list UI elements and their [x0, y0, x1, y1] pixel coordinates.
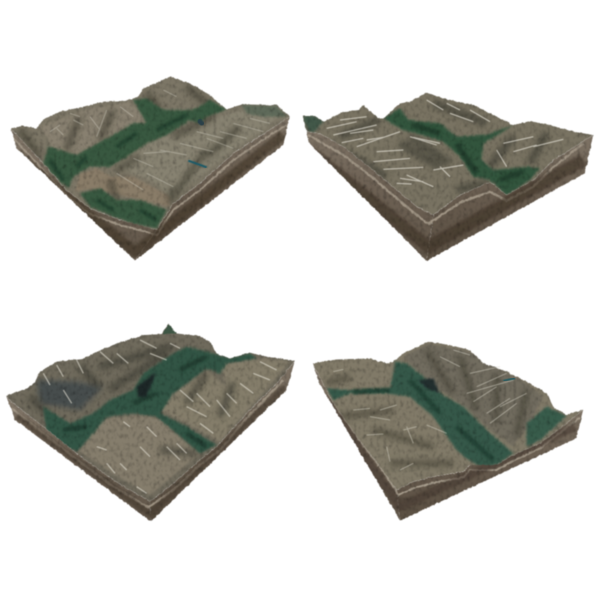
snow highlights: [43, 340, 277, 493]
terrain block: top left: [10, 76, 290, 261]
top surface: [302, 92, 594, 216]
side faces: [6, 361, 295, 522]
ridge shadows: [20, 87, 240, 203]
ridge shadows: [327, 350, 527, 463]
dark crag: [418, 378, 440, 393]
snow highlights: [327, 100, 563, 187]
ridge shadows: [327, 103, 547, 190]
infographic: four terrain block views: [6, 76, 594, 522]
side faces: [11, 117, 290, 261]
upper ridge rock: [403, 343, 543, 447]
green foreground: [80, 188, 167, 228]
top surface: [10, 76, 290, 230]
highlights and lakes: [50, 90, 270, 190]
top surface: [312, 341, 583, 490]
highlights and lake: [333, 350, 527, 470]
terrain block: bottom left: [6, 323, 296, 522]
terrain block: top right: [302, 92, 594, 262]
green valley: [43, 98, 227, 188]
green valley: [327, 362, 513, 467]
lit slopes: [80, 415, 200, 495]
side faces: [313, 363, 583, 521]
top surface: [6, 323, 296, 502]
side faces: [306, 131, 594, 262]
terrain block: bottom right: [312, 341, 584, 521]
green valley: [43, 347, 257, 453]
lit slopes: [128, 111, 275, 192]
green valley: [383, 108, 540, 195]
shadowed bluish rock: [37, 380, 103, 410]
